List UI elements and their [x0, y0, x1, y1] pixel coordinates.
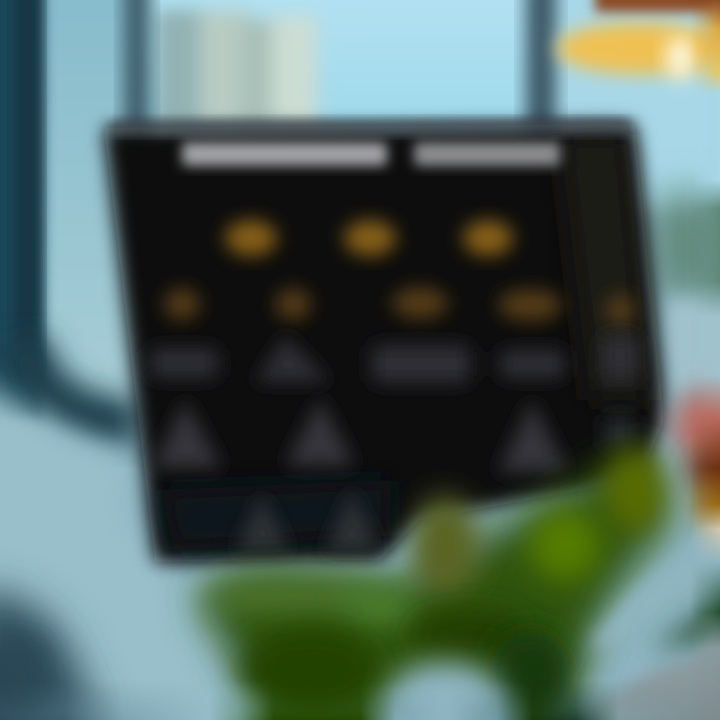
building in window view: [155, 10, 317, 130]
right edge colour strip: [690, 0, 720, 720]
grey menu text, fourth row: [152, 398, 636, 472]
gold category labels, top row: [225, 220, 513, 256]
grey menu text, third row: [150, 335, 638, 383]
red and orange fruit, right edge: [672, 389, 720, 525]
green plant leaves: [195, 448, 670, 720]
panel: dark menu board: [104, 120, 664, 562]
ceiling lamp: [556, 0, 720, 80]
grey menu text, fifth row: [235, 490, 380, 552]
draped cloth, bottom left: [0, 375, 240, 720]
pale blurred foreground shapes, bottom: [387, 540, 720, 720]
heading: blurred title: [182, 142, 560, 166]
window frame: [0, 0, 556, 425]
gold column labels, second row: [164, 287, 634, 326]
bottom edge colour strip: [0, 685, 714, 720]
